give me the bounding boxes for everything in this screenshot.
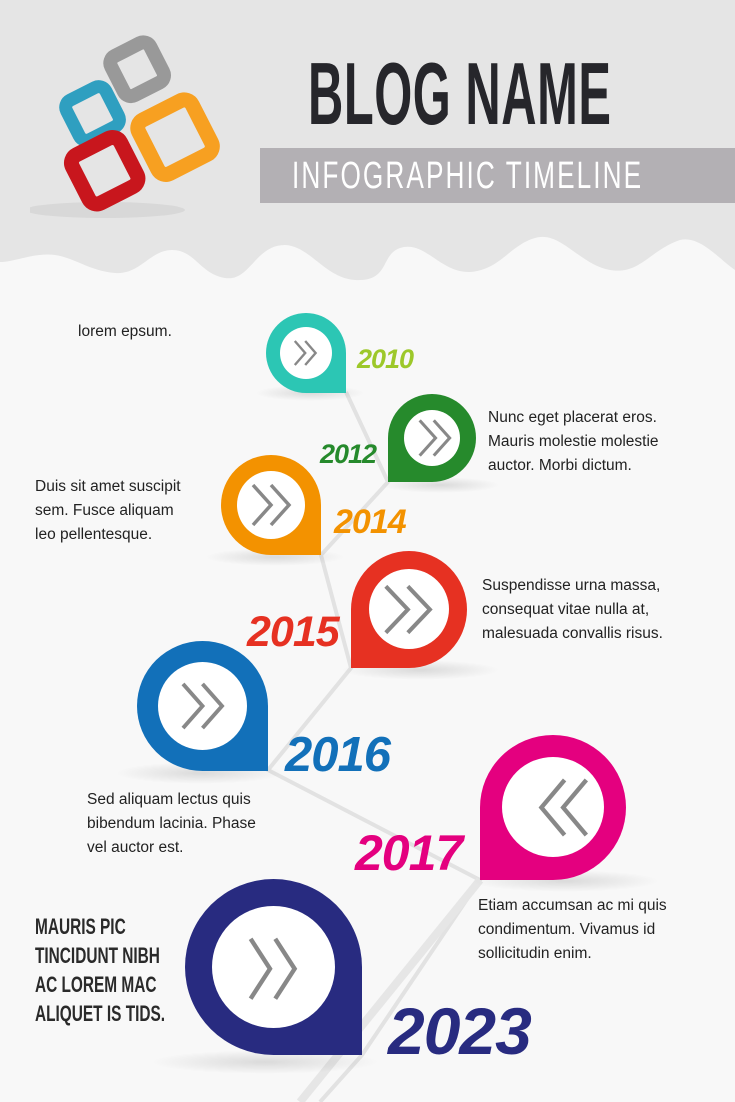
pin 2012 xyxy=(388,394,476,482)
text 2014: leo pellentesque. xyxy=(35,526,152,543)
text 2017: condimentum. Vivamus id xyxy=(478,921,655,938)
bold note: MAURIS PIC xyxy=(35,914,126,939)
text 2016: bibendum lacinia. Phase xyxy=(87,815,256,832)
text 2017 xyxy=(478,897,667,962)
pin 2014 xyxy=(221,455,321,555)
year 2017: 2017 xyxy=(355,825,462,881)
bold note: TINCIDUNT NIBH xyxy=(35,943,160,968)
text 2017: sollicitudin enim. xyxy=(478,945,592,962)
text 2017: Etiam accumsan ac mi quis xyxy=(478,897,667,914)
subtitle bar: INFOGRAPHIC TIMELINE xyxy=(292,155,643,197)
year 2015: 2015 xyxy=(247,608,339,656)
text 2012: Mauris molestie molestie xyxy=(488,433,659,450)
year 2016: 2016 xyxy=(285,728,390,782)
logo xyxy=(30,35,220,218)
text 2014: Duis sit amet suscipit xyxy=(35,478,181,495)
text 2012: Nunc eget placerat eros. xyxy=(488,409,657,426)
text 2015: Suspendisse urna massa, xyxy=(482,577,660,594)
pin 2023 xyxy=(185,879,362,1055)
pin 2016 xyxy=(137,641,268,771)
pin 2015 xyxy=(351,551,467,668)
year 2012: 2012 xyxy=(320,439,376,469)
text 2012 xyxy=(488,409,659,474)
year 2010: 2010 xyxy=(357,344,413,374)
bold note: AC LOREM MAC xyxy=(35,972,156,997)
text 2016: vel auctor est. xyxy=(87,839,184,856)
title: BLOG NAME xyxy=(308,44,611,143)
text 2014 xyxy=(35,478,181,543)
subtitle bar xyxy=(260,148,735,203)
text 2016: Sed aliquam lectus quis xyxy=(87,791,251,808)
text 2015: consequat vitae nulla at, xyxy=(482,601,649,618)
header background with wave xyxy=(0,0,735,280)
year 2023: 2023 xyxy=(388,994,531,1068)
text 2010: lorem epsum. xyxy=(78,323,172,340)
text 2015 xyxy=(482,577,663,642)
text 2012: auctor. Morbi dictum. xyxy=(488,457,632,474)
text 2014: sem. Fusce aliquam xyxy=(35,502,174,519)
year 2014: 2014 xyxy=(334,503,406,541)
shadows xyxy=(255,385,365,401)
text 2016 xyxy=(87,791,256,856)
text 2015: malesuada convallis risus. xyxy=(482,625,663,642)
pin 2017 xyxy=(480,735,626,880)
pin 2010 xyxy=(266,313,346,393)
bold note xyxy=(35,914,165,1026)
bold note: ALIQUET IS TIDS. xyxy=(35,1001,165,1026)
